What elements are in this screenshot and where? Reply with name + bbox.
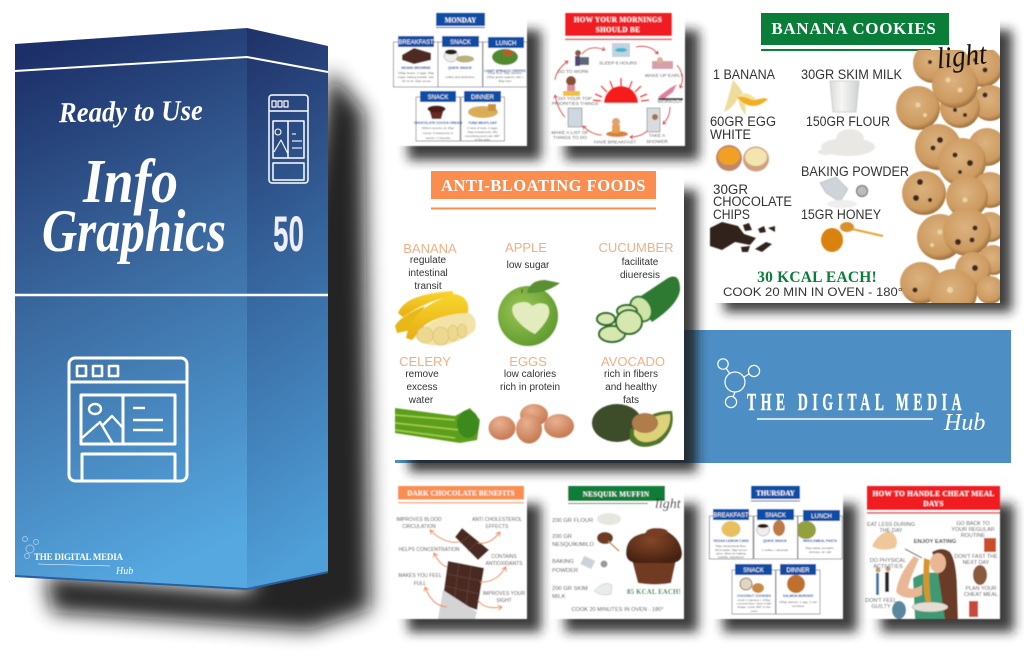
- morning step labels: TAKE A: [649, 133, 666, 139]
- monday meal cards: 30gr breadcrumb, Mix: [467, 130, 498, 134]
- thursday meal cards: oven: [751, 609, 758, 613]
- panel: how to handle cheat meal days: [865, 486, 1000, 619]
- ingredient labels: CHIPS: [713, 207, 750, 222]
- cheat meal side figures: [872, 532, 996, 619]
- thursday meal cards: VEGAN LEMON CAKE: [713, 539, 750, 543]
- anti-bloating title: ANTI-BLOATING FOODS: [441, 176, 646, 195]
- muffin ingredient labels: MILK: [552, 594, 566, 600]
- light script label: light: [935, 37, 989, 75]
- thursday meal cards: crumbed: [792, 604, 804, 608]
- food names: APPLE: [505, 240, 547, 255]
- anti-bloating title: [431, 171, 656, 210]
- chocolate benefit labels: IMPROVES BLOOD: [396, 517, 442, 523]
- cheat meal tips: DO PHYSICAL: [870, 558, 906, 564]
- banana cookies title: [761, 13, 949, 51]
- cheat meal tips: [865, 521, 998, 610]
- icon: bananas: [395, 291, 476, 345]
- icon: eggs: [716, 145, 769, 172]
- cheat meal tips: YOUR REGULAR: [951, 527, 995, 533]
- cookie pile: [895, 50, 1000, 303]
- morning step illustrations: [563, 43, 683, 137]
- thursday meal cards: 1 coffee + almonds: [762, 548, 789, 552]
- box side number: 50: [273, 206, 304, 262]
- thursday meal cards: powder, sweetener: [718, 555, 744, 559]
- ingredient labels: WHITE: [710, 127, 751, 142]
- cheat meal tips: PLAN YOUR: [965, 586, 997, 592]
- mornings title: HOW YOUR MORNINGS: [574, 16, 662, 24]
- cheat meal tips: EAT LESS DURING: [867, 522, 915, 528]
- muffin ingredient labels: [552, 518, 594, 600]
- muffin ingredient labels: POWDER: [552, 568, 578, 574]
- food names: EGGS: [509, 354, 547, 369]
- food benefits: low sugar: [507, 260, 550, 271]
- box logo: THE DIGITAL MEDIA: [34, 552, 124, 562]
- chocolate benefit labels: HELPS CONCENTRATION: [398, 547, 460, 553]
- thursday meal cards: COCONUT COOKIES: [737, 594, 772, 598]
- icon: milk glass: [830, 81, 859, 112]
- monday title: MONDAY: [445, 16, 476, 24]
- thursday meal cards: BREAKFAST: [713, 513, 749, 519]
- food benefits: [405, 255, 660, 406]
- ingredient labels: 150GR FLOUR: [806, 114, 890, 129]
- product box: [15, 28, 328, 590]
- monday meal cards: DINNER: [471, 95, 495, 101]
- thursday meal cards: 35ml water, 30gr lemon: [715, 548, 747, 552]
- morning step labels: SHOWER: [646, 139, 668, 145]
- chocolate benefit labels: ANTIOXIDANTS: [486, 561, 523, 567]
- muffin calorie note: 85 KCAL EACH!: [627, 589, 681, 596]
- ingredient labels: [710, 67, 909, 222]
- thursday meal cards: SNACK: [743, 568, 764, 574]
- box side face: [247, 28, 328, 590]
- cheat meal tips: NEXT DAY: [963, 560, 990, 566]
- cheat meal tips: DON'T FEEL: [865, 598, 897, 604]
- cheat meal tips: DON'T FAST THE: [954, 554, 998, 560]
- food names: AVOCADO: [601, 354, 665, 369]
- icon: browser window, side: [269, 95, 308, 183]
- food benefits: facilitate: [622, 257, 659, 268]
- chocolate benefit labels: CONTAINS: [491, 554, 517, 560]
- morning step labels: WORKOUT: [657, 99, 683, 105]
- chocolate benefit labels: EFFECTS: [486, 524, 509, 530]
- box front face: [15, 28, 247, 590]
- chocolate benefit labels: FULL: [414, 581, 426, 587]
- panel: banana cookies: [710, 12, 1008, 317]
- thursday meal cards: 50gr wholewheat flour,: [716, 544, 747, 548]
- cheat meal tips: ROUTINE: [961, 533, 986, 539]
- box drop shadow: [45, 70, 370, 630]
- icon: avocado: [592, 404, 673, 447]
- monday meal cards: sugar, baking powder, salt,: [398, 75, 434, 79]
- panel: anti-bloating foods: [395, 170, 684, 460]
- thursday meal cards: WHOLEMEAL PASTA: [803, 539, 838, 543]
- food names: CUCUMBER: [598, 240, 674, 255]
- monday meal cards: 500ml coconut oil, 30gr: [422, 126, 454, 130]
- monday meal cards: 200gr flour, 50gr spinach,: [488, 71, 523, 75]
- ingredient labels: BAKING POWDER: [801, 164, 909, 179]
- thursday meal cards: juice, 30ml oil, baking: [715, 552, 746, 556]
- morning step labels: SLEEP 8 HOURS: [599, 60, 637, 66]
- panel: thursday meal plan: [709, 486, 843, 619]
- panel: how your mornings should be: [551, 13, 685, 146]
- thursday meal cards: LUNCH: [811, 514, 832, 520]
- thursday meal cards: DINNER: [786, 568, 810, 574]
- morning step labels: HAVE BREAKFAST: [594, 140, 636, 146]
- monday meal cards: 50gr ham: [498, 79, 512, 83]
- food benefits: diueresis: [620, 270, 660, 281]
- monday meal cards: stevia + 2 biscuits: [426, 136, 451, 140]
- panel: monday meal plan: [394, 13, 527, 146]
- morning step labels: GO TO WORK: [557, 69, 590, 75]
- muffin script label: light: [655, 497, 682, 512]
- food benefits: and healthy: [605, 382, 657, 393]
- icon: rising sun: [593, 78, 649, 103]
- cheat meal tips: THE DAY: [880, 528, 903, 534]
- chocolate benefit labels: [396, 517, 525, 604]
- monday meal cards: CHOCOLATE COCOA CREAM: [414, 121, 462, 125]
- icon: cucumber: [597, 276, 680, 342]
- monday meal cards: SNACK: [428, 95, 448, 101]
- box heading: graphics: Graphics: [42, 198, 226, 264]
- icon: honey dipper: [821, 222, 883, 252]
- food benefits: fats: [623, 395, 639, 406]
- food benefits: water: [408, 395, 434, 406]
- thursday meal cards: [710, 509, 842, 614]
- ingredient labels: 30GR SKIM MILK: [801, 67, 902, 82]
- monday meal cards: coffee and pistachios: [445, 75, 475, 79]
- cheat meal title: DAYS: [923, 499, 944, 508]
- food names: CELERY: [399, 354, 451, 369]
- food benefits: regulate: [410, 255, 447, 266]
- chocolate benefit labels: ANTI CHOLESTEROL: [472, 517, 522, 523]
- monday meal cards: cocoa, 2 teaspoons of: [423, 131, 453, 135]
- box logo: [22, 536, 133, 577]
- box heading: info: Info: [82, 148, 178, 216]
- food benefits: transit: [414, 281, 442, 292]
- thursday meal cards: SALMON BURGER: [783, 594, 814, 598]
- muffin ingredient labels: 200 GR SKIM: [552, 586, 588, 592]
- thursday meal cards: coconut flour. Give a ball: [737, 602, 771, 606]
- monday meal cards: 100gr beans, 2 eggs, 40gr: [398, 71, 434, 75]
- blue brand banner: [395, 330, 1011, 463]
- monday meal cards: SNACK: [450, 40, 471, 46]
- muffin ingredient labels: NESQUIK/MILO: [552, 542, 594, 548]
- muffin ingredient labels: 200 GR FLOUR: [552, 518, 593, 524]
- muffin ingredient labels: 200 GR: [552, 534, 572, 540]
- panel: nesquik muffin: [551, 486, 684, 619]
- banner brand name: THE DIGITAL MEDIA: [747, 389, 962, 416]
- muffin ingredient labels: BAKING: [552, 559, 574, 565]
- cheat meal tips: GO BACK TO: [956, 521, 990, 527]
- monday meal cards: 2 cans of tuna, 2 eggs,: [467, 126, 498, 130]
- icon: green apple: [498, 280, 560, 346]
- cheat meal title: HOW TO HANDLE CHEAT MEAL: [873, 489, 994, 498]
- woman eating spaghetti illustration: [896, 549, 958, 619]
- morning step labels: THINGS TO DO: [553, 135, 587, 141]
- monday meal cards: 150gr greek yoghurt, salt +: [487, 75, 524, 79]
- cheat meal tips: ACTIVITIES: [873, 564, 903, 570]
- box logo: Hub: [115, 566, 133, 577]
- morning step labels: WAKE UP EARLY: [645, 73, 684, 79]
- monday meal cards: everything and cook 180°: [465, 134, 501, 138]
- thursday meal cards: shrimps, oil, salt: [809, 550, 831, 554]
- muffin cooking note: COOK 20 MINUTES IN OVEN - 180°: [571, 607, 664, 613]
- chocolate title: DARK CHOCOLATE BENEFITS: [407, 490, 515, 498]
- morning step labels: DO YOUR TOP: [558, 96, 592, 102]
- mornings title: SHOULD BE: [596, 26, 640, 34]
- food benefits: excess: [406, 382, 438, 393]
- food names: [399, 240, 674, 369]
- chocolate benefit labels: MAKES YOU FEEL: [398, 573, 442, 579]
- chocolate benefit labels: SIGHT: [496, 598, 512, 604]
- thursday meal cards: QUICK SNACK: [763, 539, 788, 543]
- food benefits: rich in protein: [500, 382, 560, 393]
- food benefits: rich in fibers: [604, 369, 658, 380]
- food benefits: low calories: [504, 369, 556, 380]
- ingredient labels: 15GR HONEY: [801, 207, 881, 222]
- monday meal cards: [394, 36, 527, 142]
- cookies cooking note: COOK 20 MIN IN OVEN - 180°: [723, 285, 903, 299]
- morning step labels: MAKE A LIST OF: [552, 130, 589, 136]
- chocolate bar illustration: [438, 528, 489, 619]
- monday meal cards: in the oven: [475, 138, 490, 142]
- chocolate benefit arrows: [425, 530, 506, 608]
- icon: celery: [395, 408, 480, 443]
- muffin illustration: [626, 528, 682, 584]
- monday meal cards: BEANS BROWNIE: [401, 66, 431, 70]
- monday meal cards: QUICK SNACK: [448, 66, 473, 70]
- cheat meal tips: CHEAT MEAL: [964, 592, 998, 598]
- icon: brown eggs: [488, 404, 574, 444]
- ingredient labels: 60GR EGG: [710, 114, 776, 129]
- ingredient labels: 30GR: [713, 182, 748, 197]
- thursday meal cards: 150gr salmon, 1 egg, 1 rust: [779, 600, 817, 604]
- thursday meal cards: 50gr pasta, pumpkin,: [806, 546, 835, 550]
- monday meal cards: LIGHT SPINACH CREPES: [484, 69, 526, 73]
- monday meal cards: BREAKFAST: [398, 40, 434, 46]
- food benefits: intestinal: [408, 268, 448, 279]
- panel: dark chocolate benefits: [394, 486, 527, 619]
- thursday meal cards: crush 1 banana + 100gr: [738, 598, 770, 602]
- morning step labels: [552, 60, 684, 146]
- icon: browser window, front: [69, 358, 187, 481]
- food names: BANANA: [403, 241, 457, 256]
- monday meal cards: TUNA MEATLOAF: [468, 121, 497, 125]
- morning step labels: PRIORITIES THINGS: [552, 101, 598, 107]
- thursday meal cards: shape. Cook 180° in the: [737, 605, 771, 609]
- box heading: ready to use: Ready to Use: [58, 95, 203, 129]
- mornings title: [565, 13, 672, 40]
- panel shadows: [408, 30, 1014, 632]
- chocolate benefit labels: CIRCULATION: [402, 524, 436, 530]
- thursday title: THURSDAY: [756, 490, 795, 498]
- icon: baking powder: [820, 177, 868, 208]
- food benefits: remove: [405, 369, 439, 380]
- cheat meal tips: GUILTY: [871, 604, 891, 610]
- cheat meal title: [867, 486, 1000, 514]
- chocolate benefit labels: IMPROVES YOUR: [483, 591, 525, 597]
- banana cookies title: BANANA COOKIES: [771, 19, 937, 38]
- banner logo mark: [718, 359, 760, 408]
- icon: banana: [724, 80, 768, 115]
- muffin ingredient icons: [580, 513, 621, 595]
- ingredient labels: 1 BANANA: [713, 67, 775, 82]
- morning cycle arrows: [555, 46, 682, 137]
- cookies calorie note: 30 KCAL EACH!: [757, 269, 877, 286]
- monday meal cards: LUNCH: [496, 41, 516, 47]
- muffin title: NESQUIK MUFFIN: [583, 490, 650, 498]
- monday meal cards: 30 ml oil, 20gr cocoa: [402, 79, 431, 83]
- enjoy eating label: ENJOY EATING: [914, 539, 957, 545]
- icon: flour pile: [818, 129, 875, 156]
- thursday meal cards: SNACK: [765, 513, 786, 519]
- ingredient labels: CHOCOLATE: [713, 194, 792, 209]
- banner script word: Hub: [943, 410, 985, 436]
- icon: chocolate chips: [710, 222, 775, 252]
